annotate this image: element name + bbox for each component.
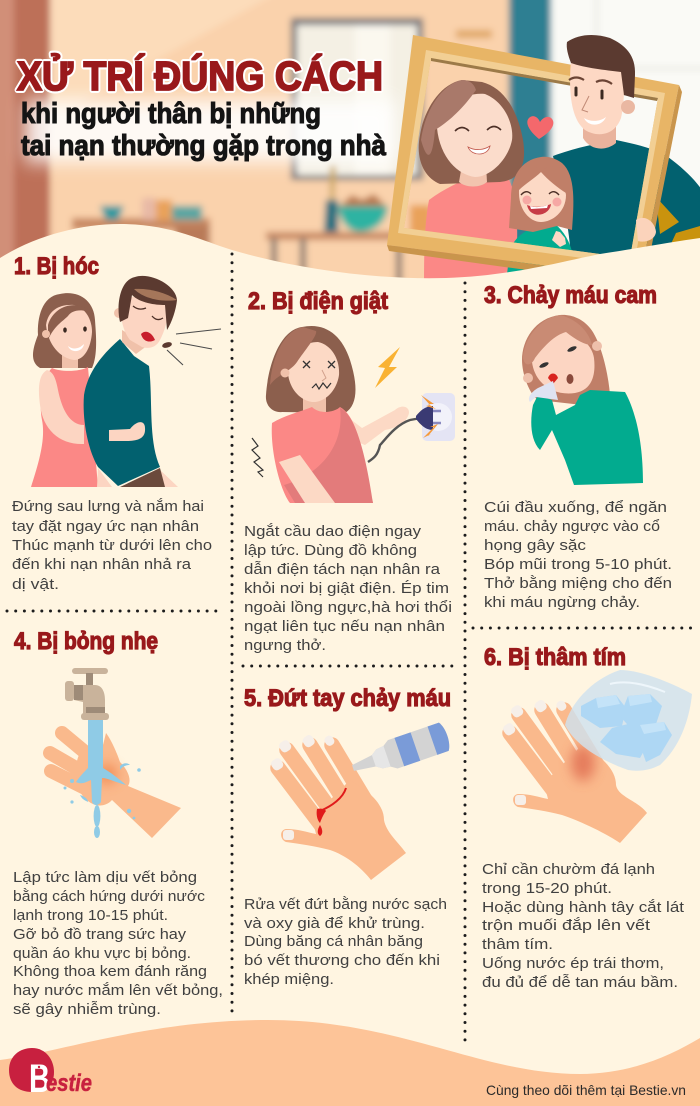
text 1: dị vật. (12, 576, 59, 593)
text 6: trong 15-20 phút. (482, 880, 612, 897)
title: tai nạn thường gặp trong nhà (21, 130, 387, 162)
text 1: đến khi nạn nhân nhả ra (12, 556, 192, 573)
text 3: Bóp mũi trong 5-10 phút. (484, 556, 672, 573)
mother (419, 80, 524, 290)
title: XỬ TRÍ ĐÚNG CÁCH (17, 53, 383, 99)
text 1: Thúc mạnh từ dưới lên cho (12, 537, 212, 554)
illustration: couple, Heimlich manoeuvre (31, 276, 221, 487)
heading 4: 4. Bị bỏng nhẹ (14, 628, 158, 655)
panel: 4. Bị bỏng nhẹ (13, 628, 223, 1018)
text 3: Thở bằng miệng cho đến (484, 575, 672, 592)
text 4: Gỡ bỏ đồ trang sức hay (13, 926, 187, 943)
text 4: bằng cách hứng dưới nước (13, 888, 206, 905)
text 6 (482, 861, 685, 991)
illustration: woman getting an electric shock (252, 326, 455, 503)
text 5: Dùng băng cá nhân băng (244, 933, 423, 950)
title: XỬ TRÍ ĐÚNG CÁCH (17, 53, 383, 99)
text 6: Uống nước ép trái thơm, (482, 955, 664, 972)
text 2: ngoài lồng ngực,hà hơi thổi (244, 599, 452, 616)
text 5: Rửa vết đứt bằng nước sạch (244, 896, 447, 913)
wooden frame (387, 35, 679, 278)
illustration: cut hand and antiseptic bottle (269, 721, 452, 880)
text 4: sẽ gây nhiễm trùng. (13, 1001, 161, 1018)
text 4: quần áo khu vực bị bỏng. (13, 945, 191, 962)
logo: Bestie (9, 1048, 92, 1101)
text 4: hay nước mắm lên vết bỏng, (13, 982, 223, 999)
text 2: khỏi nơi bị giật điện. Ép tim (244, 580, 449, 597)
heading 6: 6. Bị thâm tím (484, 644, 626, 671)
text 1: tay đặt ngay ức nạn nhân (12, 518, 199, 535)
text 5: và oxy già để khử trùng. (244, 915, 425, 932)
text 3: Cúi đầu xuống, để ngăn (484, 499, 667, 516)
father head (567, 35, 635, 149)
heading 1: 1. Bị hóc (14, 253, 99, 280)
text 6: Hoặc dùng hành tây cắt lát (482, 899, 685, 916)
text 2: lập tức. Dùng đồ không (244, 542, 417, 559)
panel: 1. Bị hóc (12, 253, 221, 593)
text 5: khép miệng. (244, 971, 334, 988)
heading 3: 3. Chảy máu cam (484, 282, 657, 309)
text 6: thâm tím. (482, 936, 553, 953)
panel: 5. Đứt tay chảy máu (244, 685, 452, 988)
panel: 3. Chảy máu cam (484, 282, 672, 611)
father hand (636, 218, 656, 242)
illustration: bruised hand and ice pack (501, 670, 692, 843)
cream content panel (0, 224, 700, 1106)
text 3: họng gây sặc (484, 537, 587, 554)
text 5 (244, 896, 447, 988)
text 5: bó vết thương cho đến khi (244, 952, 440, 969)
daughter (505, 157, 574, 290)
text 2: ngưng thở. (244, 637, 326, 654)
text 4 (13, 869, 223, 1018)
logo: Bestie: estie (46, 1070, 92, 1097)
text 4: lạnh trong 10-15 phút. (13, 907, 168, 924)
text 2: ngạt liên tục nếu nạn nhân (244, 618, 445, 635)
text 1: Đứng sau lưng và nắm hai (12, 498, 204, 515)
illustration: woman with a nosebleed (522, 315, 643, 485)
title (17, 53, 395, 162)
text 3: khi máu ngừng chảy. (484, 594, 640, 611)
logo: Bestie: B (29, 1057, 50, 1101)
panel: 2. Bị điện giật (244, 288, 455, 654)
heading 5: 5. Đứt tay chảy máu (244, 685, 451, 712)
text 3: máu. chảy ngược vào cổ (484, 518, 660, 535)
text 4: Không thoa kem đánh răng (13, 963, 207, 980)
footer band (0, 1020, 700, 1106)
text 2: Ngắt cầu dao điện ngay (244, 523, 422, 540)
illustration: hand under running tap (50, 671, 181, 838)
heart (527, 116, 553, 139)
text 2 (244, 523, 452, 654)
title: khi người thân bị những (21, 98, 321, 130)
text 6: Chỉ cần chườm đá lạnh (482, 861, 655, 878)
footer note: Cùng theo dõi thêm tại Bestie.vn (486, 1082, 686, 1098)
text 6: trộn muối đắp lên vết (482, 917, 651, 934)
father body (553, 140, 700, 262)
text 3 (484, 499, 672, 611)
text 1 (12, 498, 212, 593)
text 4: Lập tức làm dịu vết bỏng (13, 869, 197, 886)
text 2: dẫn điện tách nạn nhân ra (244, 561, 441, 578)
heading 2: 2. Bị điện giật (248, 288, 388, 315)
family portrait in frame (387, 35, 700, 290)
background: blurred living room (0, 0, 700, 320)
text 6: đu đủ để dễ tan máu bầm. (482, 974, 678, 991)
panel: 6. Bị thâm tím (482, 644, 692, 991)
